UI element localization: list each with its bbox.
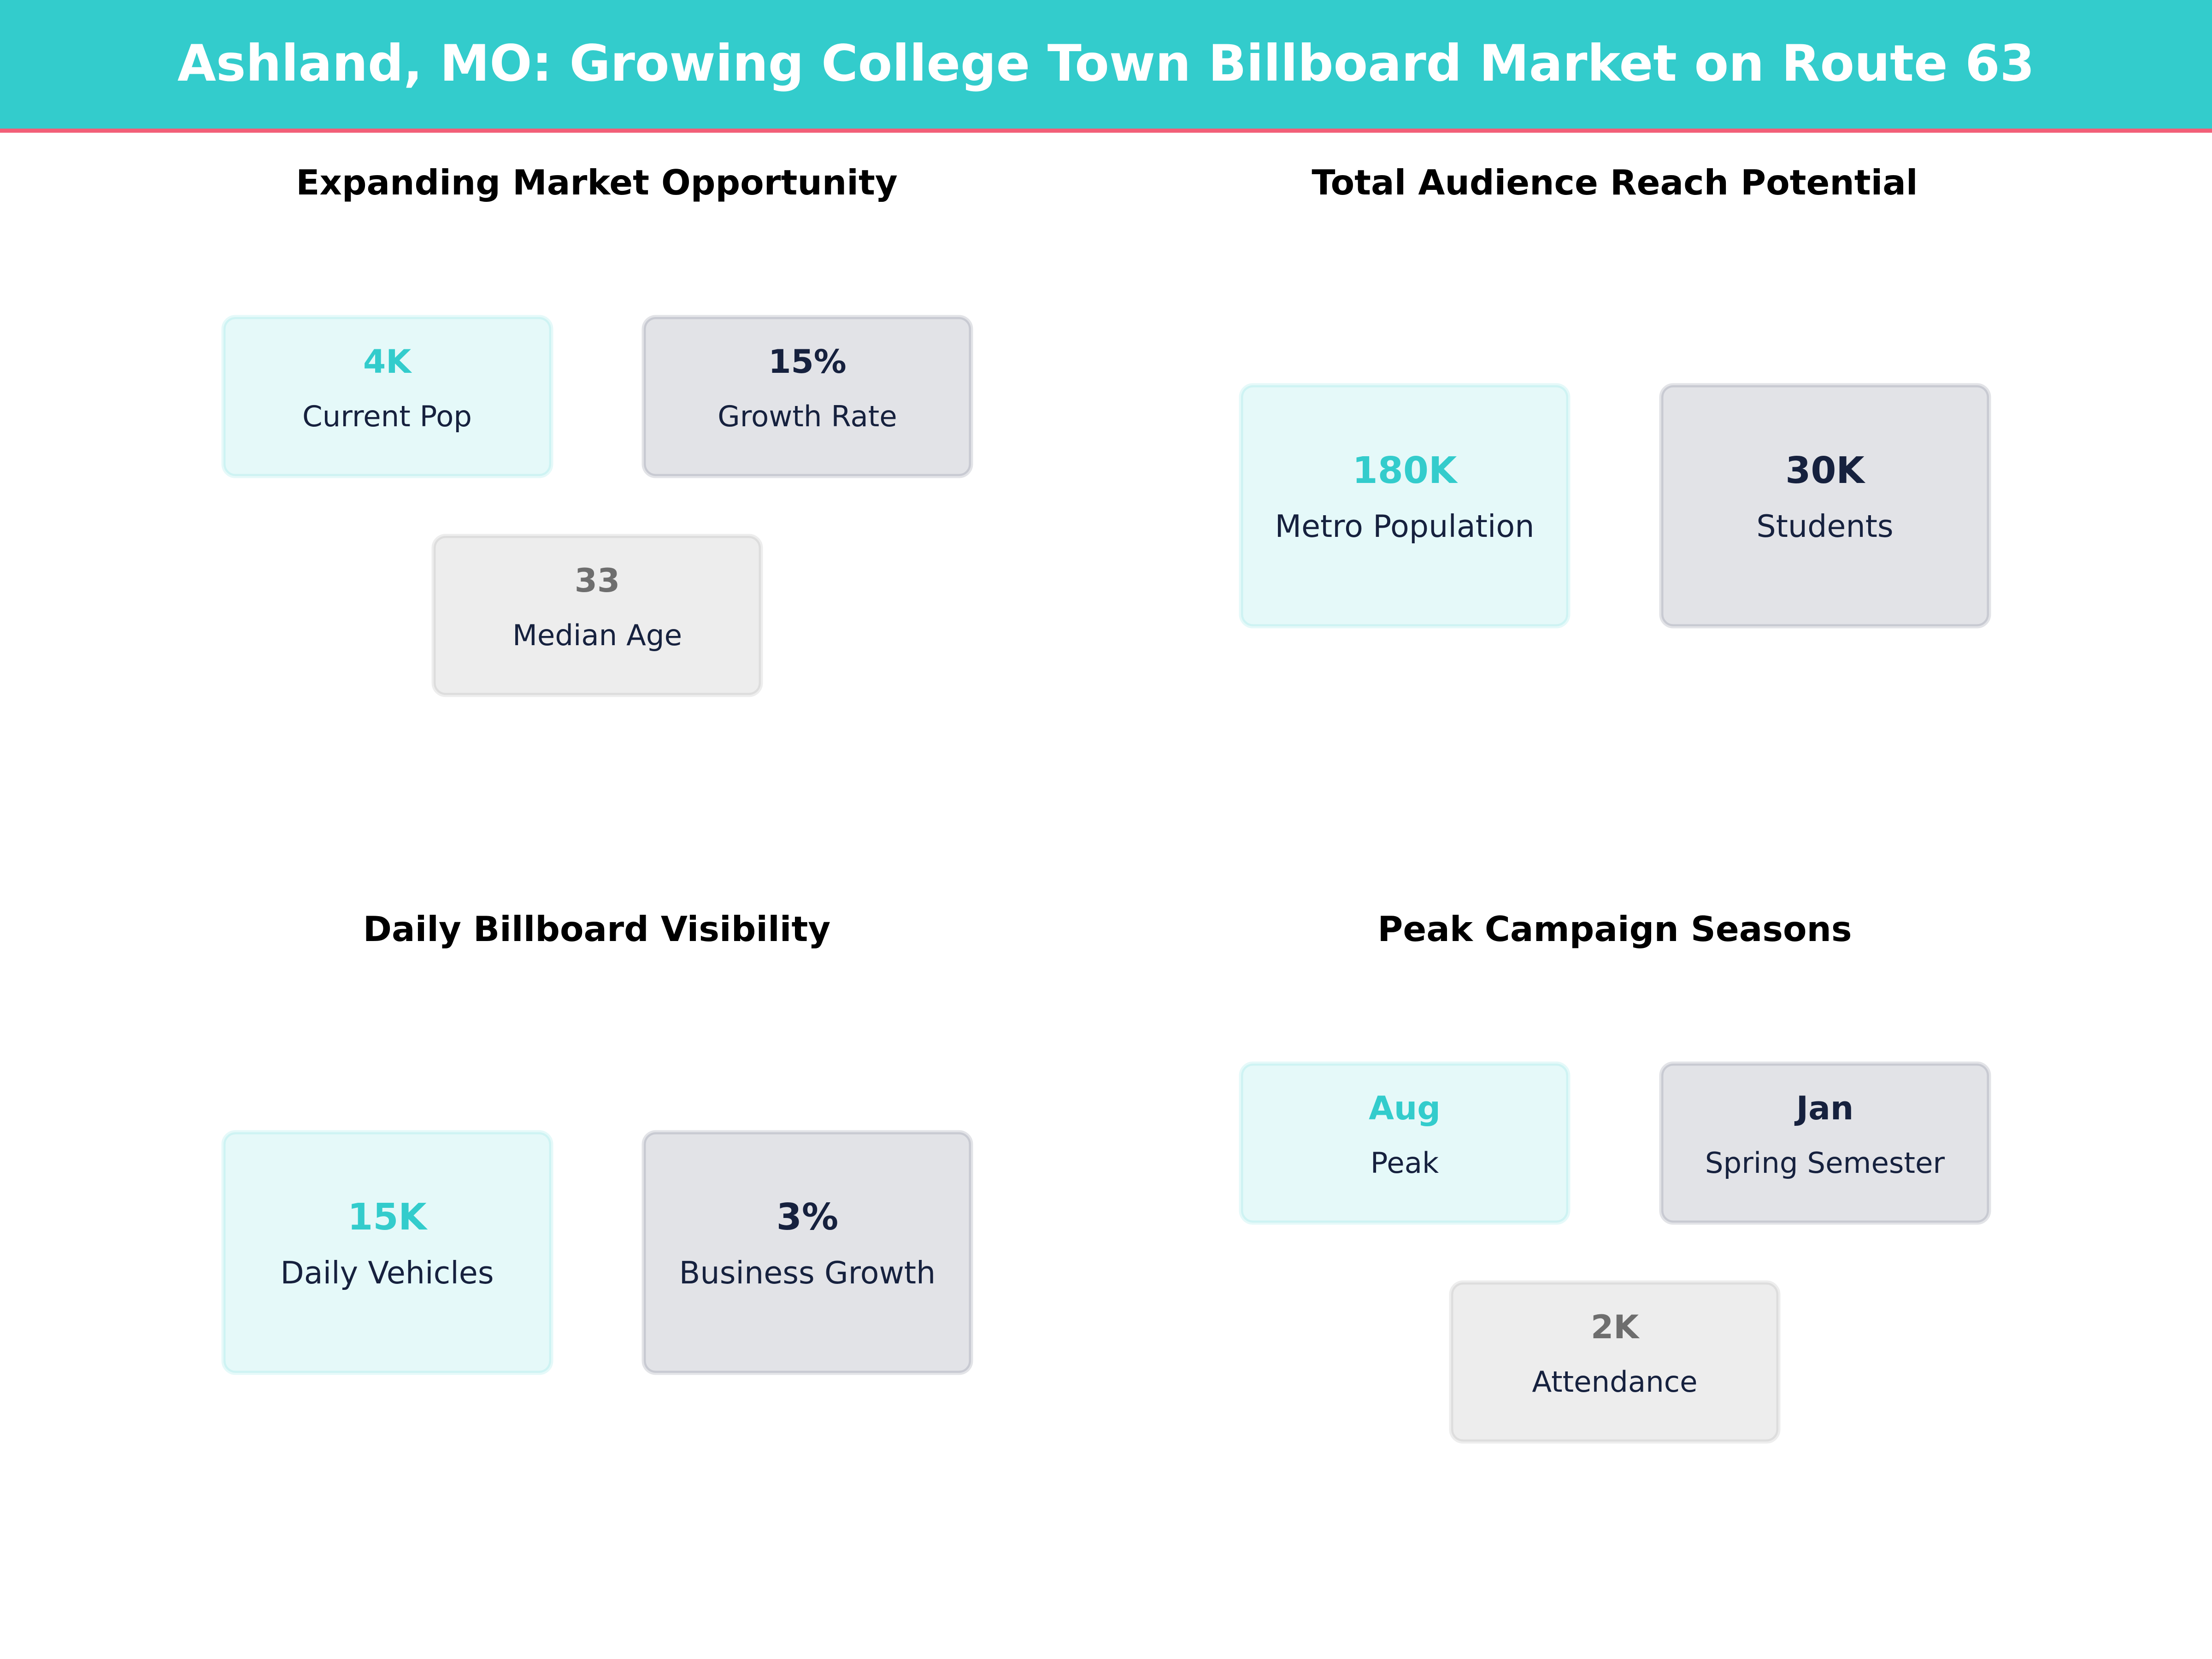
label: Current Pop [302,400,472,433]
card: median age [434,536,761,695]
value: Aug [1369,1089,1441,1127]
card: peak [1241,1064,1568,1223]
label: Daily Vehicles [280,1255,494,1291]
value: 180K [1353,449,1458,492]
label: Attendance [1532,1365,1698,1399]
panel: expanding market opportunity [224,162,971,695]
card: attendance [1451,1282,1778,1441]
header banner [0,0,2212,133]
value: 15K [347,1195,428,1238]
value: 2K [1591,1308,1640,1346]
panel: total audience reach potential [1241,162,1989,626]
label: Spring Semester [1705,1146,1945,1180]
card: business growth [644,1132,971,1373]
card: spring semester [1661,1064,1989,1223]
heading: Daily Billboard Visibility [363,909,830,949]
heading: Expanding Market Opportunity [296,162,898,203]
panel: peak campaign seasons [1241,909,1989,1441]
value: 15% [768,342,847,381]
label: Business Growth [679,1255,935,1291]
label: Median Age [512,618,682,652]
panel: daily billboard visibility [224,909,971,1373]
value: 3% [777,1195,838,1238]
card: current population [224,317,551,476]
card: students [1661,385,1989,626]
label: Metro Population [1275,508,1535,544]
card: metro population [1241,385,1568,626]
title: Ashland, MO: Growing College Town Billboard Market on Route 63 [177,34,2035,93]
heading: Peak Campaign Seasons [1377,909,1852,949]
label: Growth Rate [718,400,897,433]
card: growth rate [644,317,971,476]
value: Jan [1794,1089,1853,1127]
value: 4K [363,342,412,381]
heading: Total Audience Reach Potential [1312,162,1918,203]
label: Students [1756,508,1894,544]
card: daily vehicles [224,1132,551,1373]
label: Peak [1371,1146,1439,1180]
value: 30K [1785,449,1865,492]
value: 33 [575,561,620,600]
